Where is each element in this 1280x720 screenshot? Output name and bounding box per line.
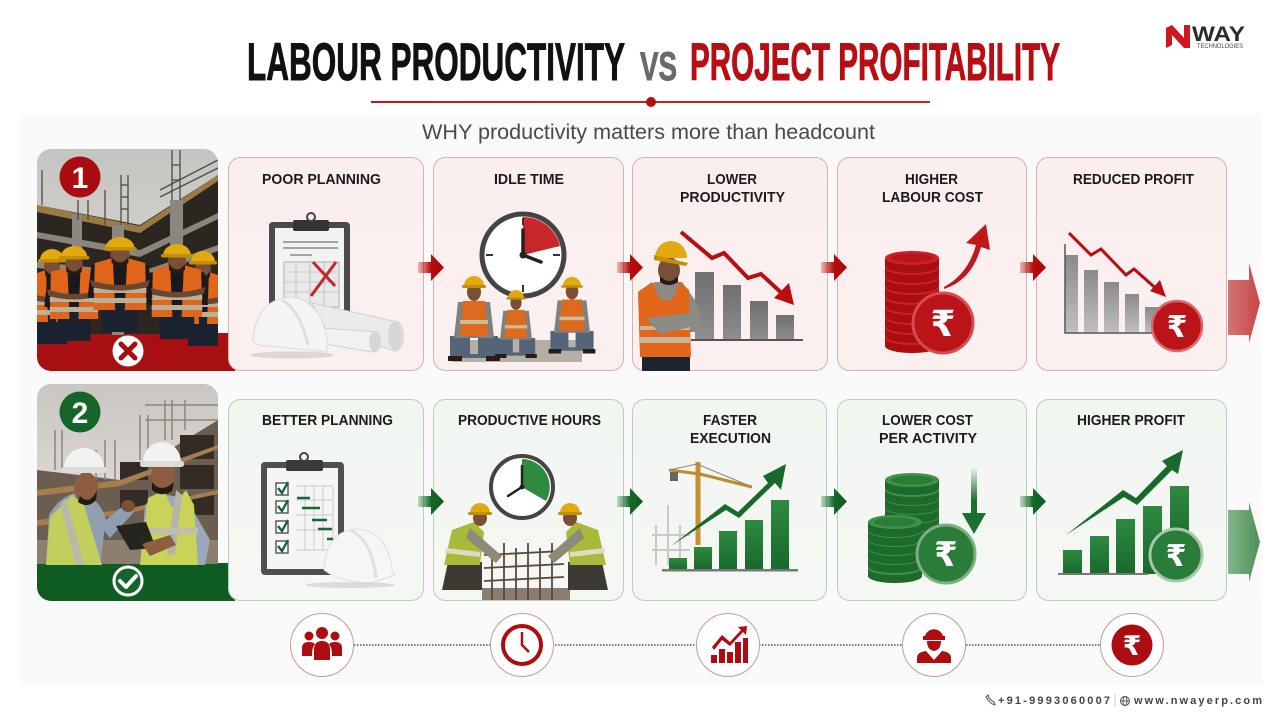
heading: BETTER PLANNING — [262, 412, 393, 429]
heading — [879, 412, 977, 447]
panel: faster execution — [632, 400, 826, 600]
arrow: red connector 1 — [418, 254, 444, 281]
bar chart with coin — [1065, 233, 1202, 351]
chart with coin — [1058, 450, 1202, 581]
icon: worker — [902, 614, 966, 676]
icon: cross — [112, 336, 144, 366]
panel: scenario 2 photo — [37, 384, 235, 601]
panel: reduced profit — [1036, 158, 1226, 370]
heading: PRODUCTIVITY — [680, 189, 785, 206]
heading: LOWER COST — [882, 412, 973, 429]
panel: scenario 1 photo — [25, 149, 235, 371]
arrow: green connector 2 — [617, 488, 643, 515]
icon: clipboard and helmet — [250, 213, 404, 358]
panel: higher labour cost — [838, 158, 1026, 370]
heading: EXECUTION — [690, 430, 771, 447]
title divider — [371, 97, 930, 107]
workers sitting — [448, 276, 595, 362]
heading: REDUCED PROFIT — [1073, 171, 1194, 188]
heading: FASTER — [703, 412, 757, 429]
chart with coin: ₹ — [1166, 539, 1186, 574]
arrow: green connector 3 — [821, 488, 847, 515]
badge: number 1 — [60, 156, 100, 198]
left engineer — [46, 448, 135, 565]
chart with crane — [652, 462, 798, 572]
icon: clipboard with gantt and helmet — [261, 453, 395, 588]
icon: coin stack with rising arrow: ₹ — [930, 304, 956, 345]
subtitle: WHY productivity matters more than headcount — [422, 121, 875, 144]
heading: LOWER — [707, 171, 757, 188]
arrow: red connector 3 — [821, 254, 847, 281]
footer contact: +91-9993060007 — [998, 695, 1110, 707]
heading: HIGHER — [905, 171, 958, 188]
arrow: green connector 4 — [1020, 488, 1046, 515]
icon: green coins with down arrow: ₹ — [934, 535, 958, 575]
arrow: green outcome — [1228, 502, 1260, 582]
icon: rupee — [1100, 614, 1164, 676]
icon: clock — [491, 456, 553, 518]
arrow: red connector 2 — [617, 254, 643, 281]
icon: rupee: ₹ — [1123, 631, 1141, 662]
heading: PER ACTIVITY — [879, 430, 977, 447]
heading: IDLE TIME — [494, 171, 564, 188]
logo — [1166, 23, 1245, 50]
right engineer — [116, 442, 210, 565]
icon: clock — [490, 614, 554, 676]
footer contact — [986, 694, 1262, 707]
panel: productive hours — [434, 400, 624, 600]
heading: POOR PLANNING — [262, 171, 381, 188]
background panel — [20, 114, 1262, 685]
heading — [690, 412, 771, 447]
panel: better planning — [228, 400, 424, 600]
panel: idle time — [434, 158, 624, 370]
panel: higher profit — [1036, 400, 1226, 600]
icon: green coins with down arrow — [868, 467, 986, 583]
heading — [680, 171, 785, 206]
logo: WAY — [1192, 23, 1245, 46]
panel: lower cost per activity — [838, 400, 1026, 600]
worker — [638, 241, 703, 371]
arrow: red outcome — [1228, 263, 1260, 343]
workers tying rebar — [442, 503, 608, 600]
timeline dotted line — [354, 644, 1100, 646]
heading — [882, 171, 983, 206]
title: VS — [640, 45, 677, 89]
icon: check — [114, 567, 142, 595]
panel: poor planning — [228, 158, 424, 370]
heading: HIGHER PROFIT — [1077, 412, 1185, 429]
icon: globe — [1120, 696, 1130, 706]
badge: number 1: 1 — [72, 162, 88, 195]
icon: coin stack with rising arrow — [885, 224, 990, 353]
icon: growth chart — [696, 614, 760, 676]
arrow: green connector 1 — [418, 488, 444, 515]
logo: TECHNOLOGIES — [1197, 43, 1244, 50]
title: LABOUR PRODUCTIVITY — [247, 33, 625, 92]
arrow: red connector 4 — [1020, 254, 1046, 281]
heading: PRODUCTIVE HOURS — [458, 412, 601, 429]
icon: clock — [482, 214, 564, 296]
icon: team — [290, 614, 354, 676]
badge: number 2: 2 — [72, 397, 88, 430]
footer contact: www.nwayerp.com — [1133, 695, 1262, 707]
bar chart falling — [681, 232, 803, 341]
badge: number 2 — [60, 392, 100, 432]
bar chart with coin: ₹ — [1167, 310, 1187, 345]
icon: phone — [986, 695, 995, 705]
panel: lower productivity — [632, 158, 828, 371]
heading: LABOUR COST — [882, 189, 983, 206]
